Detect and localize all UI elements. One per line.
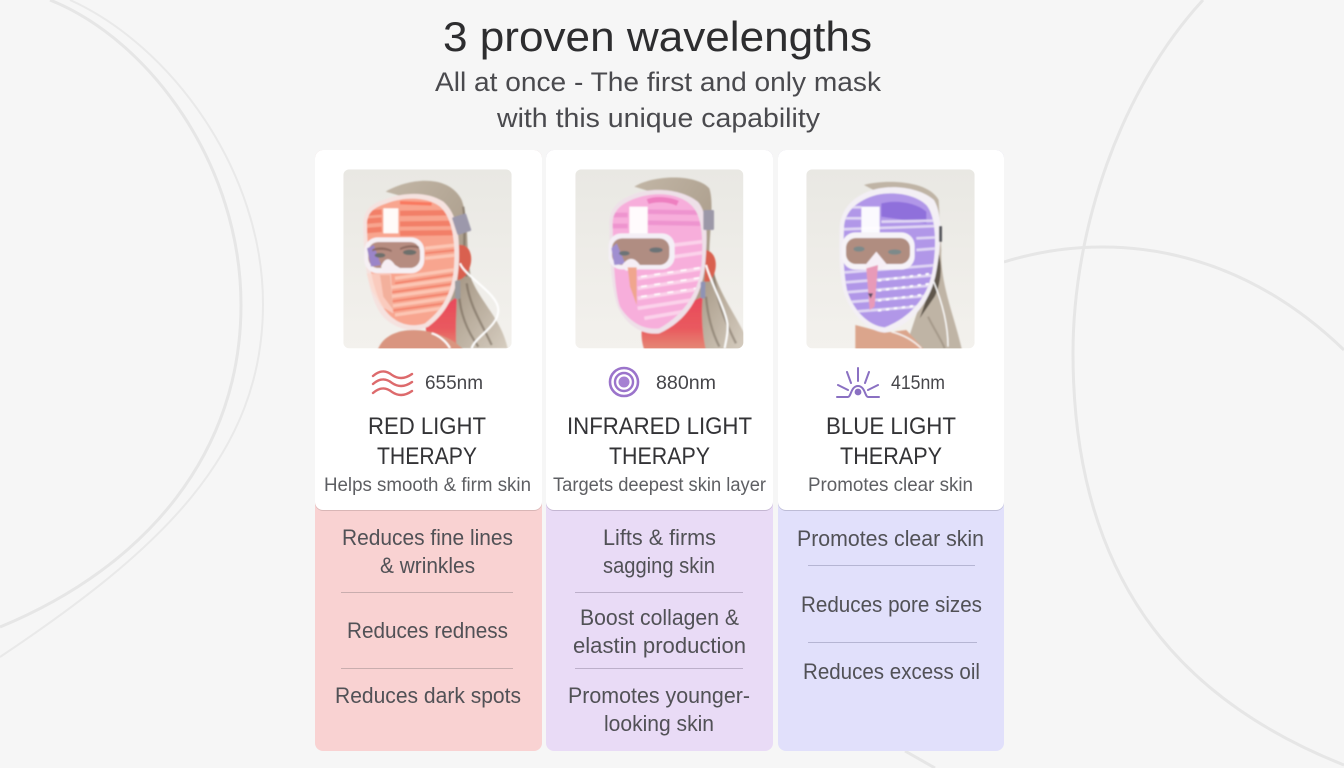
heading: red light therapy: RED LIGHT xyxy=(368,413,486,440)
panel: infrared light therapy xyxy=(546,150,773,751)
image: blue light mask xyxy=(806,169,975,350)
card: infrared xyxy=(546,150,773,511)
subtitle: with this unique capability xyxy=(496,103,821,133)
title: 3 proven wavelengths xyxy=(443,13,872,60)
wavelength: 655nm: 655nm xyxy=(425,373,483,394)
heading: infrared light therapy xyxy=(567,413,752,470)
benefits panel: blue xyxy=(778,490,1004,751)
benefits panel: red xyxy=(315,490,542,751)
benefits panel: infrared: looking skin xyxy=(604,711,714,736)
heading: infrared light therapy: INFRARED LIGHT xyxy=(567,413,752,440)
subtitle: All at once - The first and only mask xyxy=(435,67,882,97)
card: red xyxy=(315,150,542,511)
heading: infrared light therapy: THERAPY xyxy=(609,443,710,470)
tagline: infrared: Targets deepest skin layer xyxy=(553,475,767,496)
icon: concentric circles xyxy=(610,368,638,396)
benefits panel: infrared: elastin production xyxy=(573,633,746,658)
image: infrared mask xyxy=(575,169,744,350)
heading: blue light therapy xyxy=(826,413,956,470)
benefits panel: infrared: sagging skin xyxy=(603,553,715,578)
icon: light rays xyxy=(837,368,879,397)
icon: waves xyxy=(373,371,412,395)
benefits panel: blue: Promotes clear skin xyxy=(797,526,984,551)
benefits panel: blue: Reduces pore sizes xyxy=(801,592,982,617)
wavelength: 880nm: 880nm xyxy=(656,373,716,394)
heading: blue light therapy: BLUE LIGHT xyxy=(826,413,956,440)
heading: blue light therapy: THERAPY xyxy=(840,443,942,470)
benefits panel: infrared: Lifts & firms xyxy=(603,525,716,550)
benefits panel: red: Reduces dark spots xyxy=(335,683,521,708)
wavelength: 415nm: 415nm xyxy=(891,373,945,394)
subtitle xyxy=(435,67,882,133)
benefits panel: infrared: Boost collagen & xyxy=(580,605,739,630)
benefits panel: red: & wrinkles xyxy=(380,553,475,578)
panel: blue light therapy xyxy=(778,150,1004,751)
card: blue xyxy=(778,150,1004,511)
heading: red light therapy xyxy=(368,413,486,470)
panel: red light therapy xyxy=(315,150,542,751)
benefits panel: blue: Reduces excess oil xyxy=(803,659,980,684)
heading: red light therapy: THERAPY xyxy=(377,443,477,470)
benefits panel: red: Reduces redness xyxy=(347,618,508,643)
image: red light mask xyxy=(343,169,512,350)
benefits panel: infrared: Promotes younger- xyxy=(568,683,750,708)
benefits panel: red: Reduces fine lines xyxy=(342,525,513,550)
tagline: red: Helps smooth & firm skin xyxy=(324,475,531,496)
tagline: blue: Promotes clear skin xyxy=(808,475,973,496)
benefits panel: infrared xyxy=(546,490,773,751)
